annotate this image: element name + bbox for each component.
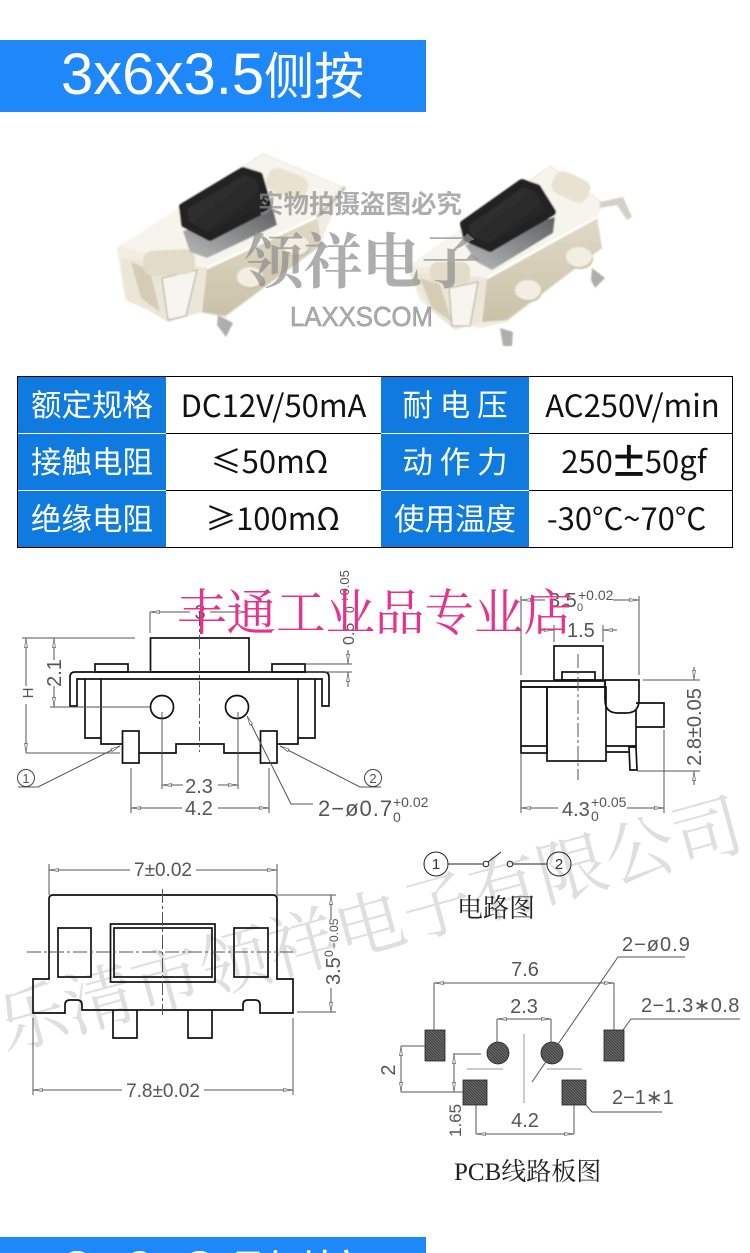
spec table [17, 376, 733, 548]
side view labels: +0.05 [591, 794, 627, 810]
cell: rated spec value: DC12V/50mA [181, 380, 366, 426]
front view labels: 2−ø0.7 [318, 796, 393, 821]
front view outline [70, 638, 329, 763]
bottom view outline [33, 895, 293, 1038]
PCB dimension labels: 2 [378, 1064, 400, 1076]
cell: actuation force value: ± [610, 432, 648, 486]
front view labels: +0.02 [393, 794, 429, 810]
bottom view labels [126, 860, 345, 1102]
front view labels: 2 [369, 771, 377, 786]
PCB dimension lines [401, 957, 740, 1134]
bottom view labels: 7.8±0.02 [126, 1081, 200, 1102]
bottom view drawing [27, 860, 345, 1102]
cell: contact resistance label [18, 433, 166, 490]
cell: rated spec label: 额定规格 [31, 381, 153, 425]
PCB dimension labels [378, 934, 740, 1137]
photo watermark: 实物拍摄盗图必究 [258, 184, 462, 221]
circuit terminal numbers: 1 [432, 856, 440, 873]
cell: withstand voltage label [381, 377, 529, 434]
PCB dimension labels: 4.2 [511, 1110, 539, 1132]
side view labels: 2.8±0.05 [684, 688, 706, 766]
side view labels: 3.5 [549, 590, 577, 612]
cell: temperature value: -30°C~70°C [547, 494, 706, 539]
cell: withstand voltage value: AC250V/min [545, 380, 720, 426]
PCB layout drawing [378, 934, 740, 1186]
bottom view labels: 0 [322, 950, 336, 957]
bottom view labels: 7±0.02 [134, 860, 192, 881]
front view labels: 3 [194, 602, 206, 624]
switch 2 [407, 165, 632, 346]
photo watermark [244, 184, 480, 332]
PCB dimension labels: 2−1.3∗0.8 [641, 995, 740, 1017]
cell: contact resistance label: 接触电阻 [31, 438, 153, 482]
PCB dimension labels: 2−1∗1 [612, 1087, 674, 1109]
side view labels [549, 587, 706, 824]
front view labels: 2.3 [185, 776, 213, 798]
cell: contact resistance value: ≤50mΩ [211, 437, 328, 482]
header band: title [0, 40, 426, 112]
PCB dimension labels: 7.6 [511, 959, 539, 981]
cell: temperature label: 使用温度 [394, 494, 516, 538]
PCB dimension labels: 2.3 [510, 996, 538, 1018]
PCB pads [425, 1030, 624, 1105]
cell: actuation force label [381, 433, 529, 490]
PCB dimension labels: 1.65 [446, 1104, 465, 1137]
side view labels: 0 [591, 808, 599, 824]
front view drawing [18, 570, 429, 825]
circuit diagram [424, 852, 571, 925]
cell: contact resistance value [166, 433, 381, 490]
photo watermark: LAXXSCOM [290, 301, 433, 332]
cell: insulation resistance label: 绝缘电阻 [31, 494, 153, 538]
bottom view labels: 3.5 [323, 957, 345, 985]
diagonal company watermark: 乐清市领祥电子有限公司 [0, 769, 750, 1071]
cell: insulation resistance value: ≥100mΩ [205, 494, 340, 539]
front view labels: 0 [393, 809, 401, 825]
cell: actuation force label: 动 作 力 [402, 438, 508, 482]
bottom view dimension lines [27, 864, 336, 1095]
front view labels: +0.05 [337, 570, 352, 603]
PCB caption: PCB线路板图 [454, 1158, 601, 1186]
pink shop watermark: 丰通工业品专业店 [177, 574, 573, 645]
side view dimension lines [521, 596, 700, 813]
cell: temperature label [381, 490, 529, 547]
side view labels: 0 [577, 602, 583, 614]
cell: withstand voltage label: 耐 电 压 [402, 381, 508, 425]
circuit caption: 电路图 [457, 888, 535, 925]
cell: insulation resistance value [166, 490, 381, 547]
cell: rated spec label [18, 377, 166, 434]
cell: temperature value [529, 490, 732, 547]
bottom view labels: −0.05 [327, 918, 341, 949]
side view labels: 4.3 [562, 799, 590, 821]
circuit terminal numbers [432, 856, 563, 873]
cell: actuation force value [529, 433, 732, 490]
front view labels: H [20, 688, 37, 698]
front view dimension lines [18, 612, 381, 813]
cell: insulation resistance label [18, 490, 166, 547]
product photo: two tactile switches with watermark [117, 153, 632, 347]
front view labels: 4.2 [185, 798, 213, 820]
switch 1 [117, 153, 345, 337]
circuit terminal numbers: 2 [555, 856, 563, 873]
front view labels: 0.5 [341, 623, 358, 645]
switch symbol [424, 852, 571, 876]
side view drawing [521, 587, 706, 824]
PCB dimension labels: 2−ø0.9 [622, 934, 691, 956]
cell: actuation force value: 250 50gf [561, 437, 707, 482]
front view labels: 2.1 [44, 659, 66, 687]
side view labels: +0.02 [578, 587, 614, 603]
photo watermark: 领祥电子 [244, 215, 480, 301]
front view labels: 0 [343, 606, 357, 613]
side view labels: 1.5 [567, 620, 595, 642]
front view labels: 1 [22, 771, 30, 786]
front view labels [18, 570, 429, 825]
side view outline [521, 646, 664, 770]
